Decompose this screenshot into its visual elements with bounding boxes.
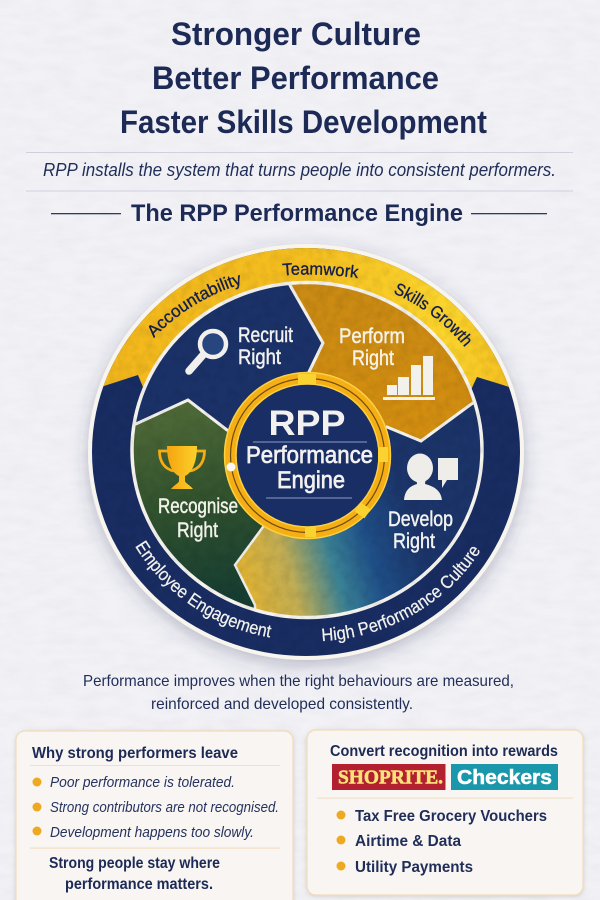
rewards list: Tax Free Grocery Vouchers <box>355 808 547 825</box>
value labels <box>148 262 470 347</box>
perform right label <box>339 325 405 370</box>
icon: trophy <box>160 446 204 489</box>
title: Faster Skills Development <box>120 104 487 140</box>
icon: person with speech bubble <box>404 454 458 500</box>
closing statement: performance matters. <box>65 876 213 893</box>
develop right label <box>388 508 453 553</box>
centre hub: Performance <box>246 442 373 469</box>
title: Stronger Culture <box>171 16 421 52</box>
inner disc base: develop segment <box>132 282 482 618</box>
title: Better Performance <box>152 60 439 96</box>
recruit right label <box>238 324 293 369</box>
value labels: Teamwork <box>282 262 359 278</box>
icon: magnifying glass <box>189 331 226 371</box>
rewards list <box>336 808 547 876</box>
navy outer band <box>92 248 520 656</box>
bullet list: Development happens too slowly. <box>50 824 254 841</box>
recognise right label: Recognise <box>158 495 238 518</box>
outcome labels: High Performance Culture <box>322 546 480 643</box>
hub text: RPP <box>268 404 346 443</box>
subtitle: RPP installs the system that turns people into consistent performers. <box>43 160 556 180</box>
inner ring line <box>132 282 482 618</box>
ring nodes <box>226 374 388 537</box>
title <box>120 16 487 140</box>
closing statement <box>49 855 220 893</box>
bullet list <box>32 774 279 841</box>
engine wheel <box>78 238 534 676</box>
panel: convert recognition into rewards <box>307 730 583 895</box>
icon: bar chart <box>383 356 435 400</box>
gold values band <box>103 248 509 388</box>
value labels: Accountability <box>148 274 240 338</box>
perform right label: Right <box>352 347 394 370</box>
panel heading: Convert recognition into rewards <box>330 743 558 760</box>
centre hub <box>224 372 390 538</box>
value labels: Skills Growth <box>394 284 470 347</box>
perform right label: Perform <box>339 325 405 348</box>
rewards list: Airtime & Data <box>355 833 461 850</box>
logo: Checkers: Checkers <box>457 767 552 789</box>
recognise right label <box>158 495 238 542</box>
caption <box>83 673 514 713</box>
closing statement: Strong people stay where <box>49 855 220 872</box>
section heading: The RPP Performance Engine <box>131 200 463 227</box>
outcome labels: Employee Engagement <box>135 540 272 638</box>
caption: Performance improves when the right behaviours are measured, <box>83 673 514 690</box>
recognise right label: Right <box>177 519 218 542</box>
bullet list: Poor performance is tolerated. <box>50 774 235 791</box>
centre hub: Engine <box>277 467 345 494</box>
develop right label: Right <box>393 530 435 553</box>
caption: reinforced and developed consistently. <box>151 696 413 713</box>
watercolour texture <box>102 248 512 620</box>
segment: recognise <box>134 402 264 608</box>
panel: why strong performers leave <box>16 731 293 900</box>
bullet list: Strong contributors are not recognised. <box>50 799 279 816</box>
develop right label: Develop <box>388 508 453 531</box>
outer rim <box>88 244 524 660</box>
recruit right label: Right <box>238 346 281 369</box>
outcome labels <box>135 540 480 643</box>
segment: perform <box>288 284 474 443</box>
rewards list: Utility Payments <box>355 859 473 876</box>
logo: Shoprite: SHOPRITE. <box>338 766 443 788</box>
segment: recruit <box>136 285 322 432</box>
panel heading: Why strong performers leave <box>32 745 238 762</box>
recruit right label: Recruit <box>238 324 293 347</box>
